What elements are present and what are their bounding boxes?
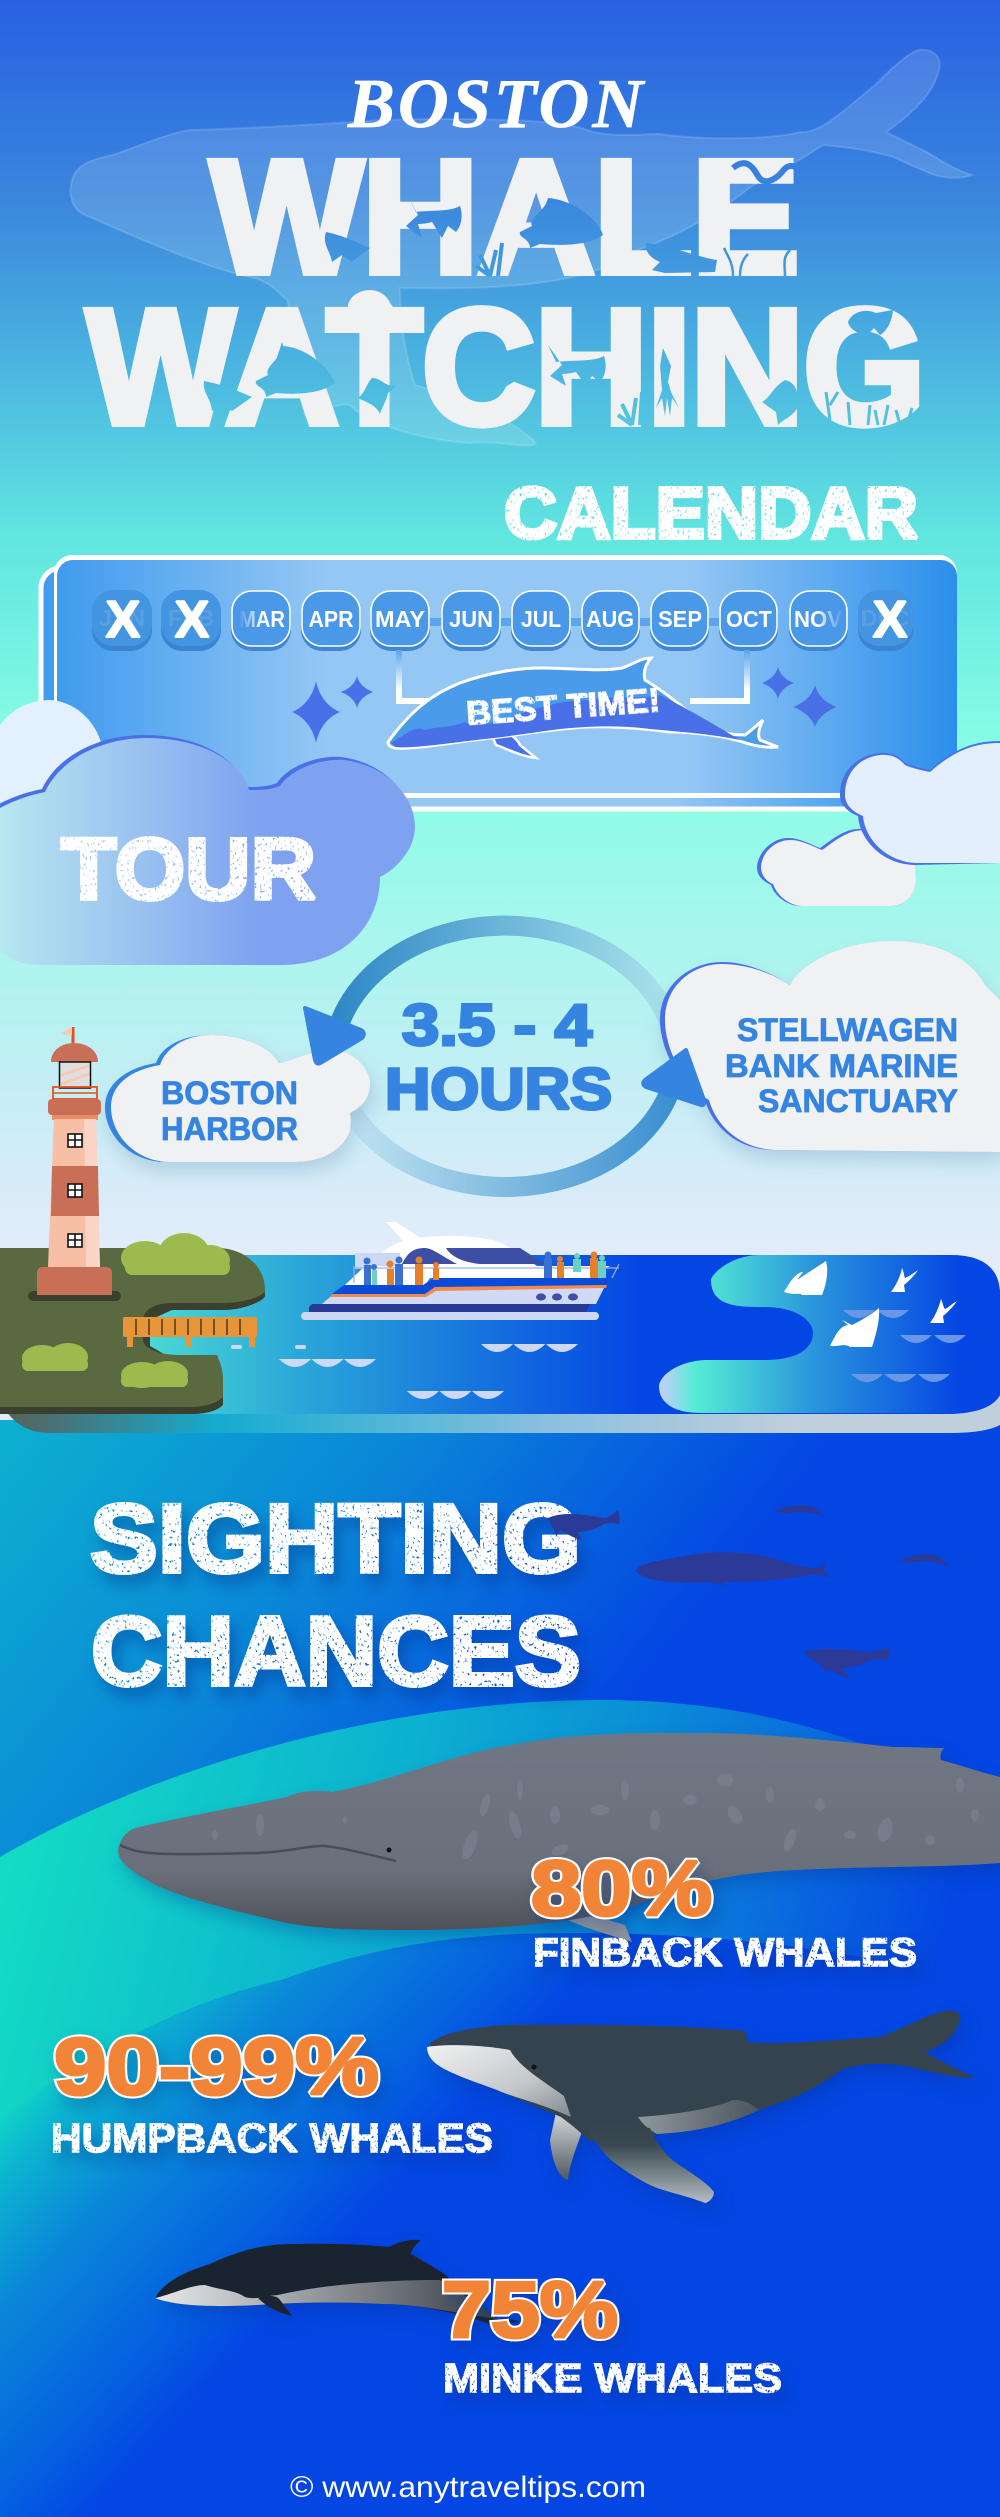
humpback front flipper xyxy=(585,2120,714,2203)
lighthouse flag xyxy=(72,1027,74,1043)
pill: September: SEP xyxy=(658,606,702,632)
boat base plate xyxy=(301,1312,599,1320)
label: humpback whales: HUMPBACK WHALES xyxy=(51,2115,493,2161)
pill: October: OCT xyxy=(726,606,772,632)
heading: Sighting Chances xyxy=(90,1484,581,1706)
icon: fish in H xyxy=(406,196,462,238)
lighthouse base xyxy=(37,1267,112,1295)
whale body xyxy=(388,658,778,748)
boat deck xyxy=(345,1266,610,1285)
lighthouse base shadow xyxy=(28,1291,121,1301)
number: 75%: 75% xyxy=(442,2265,618,2354)
boat passengers xyxy=(364,1252,606,1285)
number: 90-99%: 90-99% xyxy=(54,2022,379,2112)
sea right gradient shape xyxy=(659,1255,1000,1413)
boat xyxy=(301,1222,619,1320)
number: 75%: 75% xyxy=(442,2265,618,2354)
heading: tour: TOUR xyxy=(61,821,316,918)
icon: fish xyxy=(548,345,606,386)
pill: April: APR xyxy=(308,606,354,632)
finback mouth line xyxy=(120,1845,396,1861)
whale belly xyxy=(391,695,740,747)
pill: March xyxy=(231,591,291,651)
title word: Watching: WATCHING xyxy=(87,275,925,458)
pill: August: AUG xyxy=(586,606,634,632)
icon: big fish xyxy=(256,346,335,397)
boat blue stripe xyxy=(332,1278,609,1294)
icon: corals in G xyxy=(826,392,912,425)
label: minke whales: MINKE WHALES xyxy=(443,2355,782,2401)
bush large xyxy=(121,1233,230,1275)
number: 80%: 80% xyxy=(531,1844,712,1932)
lighthouse gallery xyxy=(48,1099,101,1115)
cloud: small right xyxy=(757,829,916,906)
ring top arc xyxy=(336,926,672,1035)
pill: June: JUN xyxy=(449,606,493,632)
pill: February unavailable: X xyxy=(175,591,210,649)
icon: seahorse xyxy=(762,380,798,425)
humpback whale xyxy=(427,2010,976,2203)
humpback body xyxy=(430,2010,976,2141)
finback mottling xyxy=(212,1774,979,1861)
icon: sea plants xyxy=(724,248,790,276)
boat antenna and dome xyxy=(386,1222,424,1243)
back panel xyxy=(41,568,941,809)
number: 90-99%: 90-99% xyxy=(54,2022,379,2112)
pill: June xyxy=(441,591,501,651)
whale flipper xyxy=(491,732,536,758)
silhouette: dolphin two xyxy=(899,1554,951,1567)
label: 3.5 - 4 hours: 3.5 - 4 xyxy=(402,993,592,1058)
icon: coral 2 xyxy=(618,392,642,425)
route ring xyxy=(336,926,672,1187)
title: Boston Whale Watching xyxy=(87,66,925,458)
minke body xyxy=(155,2240,520,2324)
pill: May: MAY xyxy=(375,606,425,632)
finback whale xyxy=(118,1733,1000,1942)
pill: December unavailable: DEC xyxy=(861,605,909,631)
ring bottom arc xyxy=(345,1085,672,1187)
best time whale badge xyxy=(388,658,778,758)
heading: Sighting Chances: CHANCES xyxy=(91,1596,581,1706)
heading: Sighting Chances: SIGHTING xyxy=(90,1484,581,1593)
distant whale silhouettes xyxy=(548,1505,951,1678)
minke belly xyxy=(155,2280,497,2319)
stat: finback xyxy=(531,1844,917,1975)
boat back cabin xyxy=(355,1253,400,1269)
label: Stellwagen Bank Marine Sanctuary: BANK MARINE xyxy=(725,1048,958,1084)
boat windows xyxy=(402,1248,457,1264)
sky background xyxy=(0,0,1000,1425)
pill: February unavailable xyxy=(161,590,221,651)
number: 80%: 80% xyxy=(531,1844,712,1932)
pill: November xyxy=(789,591,848,651)
title word: Boston: BOSTON xyxy=(347,66,645,143)
arrow: to Boston Harbor xyxy=(305,1008,364,1064)
label: Stellwagen Bank Marine Sanctuary xyxy=(725,1012,958,1119)
silhouette: dolphin one xyxy=(774,1505,825,1517)
label: Boston Harbor: BOSTON xyxy=(161,1075,298,1111)
title word: Whale: WHALE xyxy=(211,127,799,306)
pill: January unavailable xyxy=(92,590,152,651)
sea water xyxy=(0,1255,1000,1414)
icon: whale flukes xyxy=(784,1261,957,1347)
pill: August xyxy=(581,591,640,651)
tour cloud fill xyxy=(0,738,415,965)
pill: February unavailable: FEB xyxy=(168,605,214,631)
finback eye xyxy=(386,1848,392,1852)
minke flipper xyxy=(258,2296,292,2316)
pill: December unavailable: X xyxy=(873,591,908,649)
finback body xyxy=(118,1733,1000,1930)
icon: eel on E xyxy=(733,163,796,181)
pill: September xyxy=(650,591,709,651)
sea scene xyxy=(0,1027,1000,1433)
cloud: big right xyxy=(840,741,1000,865)
island xyxy=(0,1248,265,1407)
boat navy stripe xyxy=(309,1304,590,1312)
label: Stellwagen Bank Marine Sanctuary: SANCTUARY xyxy=(758,1083,958,1119)
sparkles right xyxy=(762,667,837,727)
month pills row xyxy=(92,590,913,651)
translucent humpback whale behind the title xyxy=(70,50,972,446)
icon: walrus xyxy=(646,243,717,273)
bush left xyxy=(22,1343,88,1371)
stat: humpback xyxy=(51,2022,493,2161)
cloud: back left xyxy=(0,700,130,860)
hill: upper teal xyxy=(0,1700,1000,2200)
silhouette: small humpback xyxy=(804,1648,890,1678)
pill: December unavailable xyxy=(858,590,913,651)
tour cloud outline xyxy=(0,735,412,962)
hill: lower teal xyxy=(0,1933,1000,2517)
lighthouse lantern xyxy=(60,1062,90,1088)
pill: May xyxy=(370,591,430,651)
icon: fish in G xyxy=(848,310,893,335)
lighthouse windows xyxy=(68,1134,82,1247)
silhouette: sperm whale xyxy=(636,1552,832,1586)
humpback rear flipper xyxy=(550,2112,584,2180)
pill: July: JUL xyxy=(521,606,561,632)
humpback eye xyxy=(532,2064,536,2070)
bush right xyxy=(121,1361,188,1388)
icon: turtle on top of A xyxy=(348,290,393,307)
arrow: to Stellwagen xyxy=(643,1050,704,1105)
finback flipper xyxy=(568,1915,632,1942)
footer credit: © www.anytraveltips.com xyxy=(290,2471,646,2504)
label: 3.5 - 4 hours xyxy=(385,993,612,1122)
pill: July xyxy=(511,591,571,651)
lighthouse balcony xyxy=(53,1087,97,1099)
icon: coral xyxy=(476,243,502,276)
cloud: tour xyxy=(0,735,415,965)
pill: January unavailable: JAN xyxy=(99,605,145,631)
pill: January unavailable: X xyxy=(106,591,141,649)
lighthouse dome xyxy=(51,1043,98,1062)
pill: October xyxy=(719,591,778,651)
humpback belly xyxy=(638,2100,759,2134)
deep sea background xyxy=(0,1420,1000,2517)
boat hull xyxy=(322,1278,609,1304)
icon: squid xyxy=(656,348,679,416)
cloud: Stellwagen xyxy=(660,941,1000,1152)
lighthouse tower xyxy=(48,1119,100,1267)
minke whale xyxy=(155,2240,520,2324)
icon: seal in W xyxy=(325,232,370,262)
label: Boston Harbor: HARBOR xyxy=(161,1111,298,1147)
best-time bracket xyxy=(399,650,747,701)
stat: minke xyxy=(442,2265,782,2401)
icon: fish face in C xyxy=(480,341,529,393)
pill: April xyxy=(301,591,361,651)
label: 3.5 - 4 hours: HOURS xyxy=(385,1057,612,1122)
icon: big fish in A xyxy=(520,198,603,248)
waves near whales xyxy=(843,1310,966,1382)
island edge xyxy=(0,1254,265,1414)
boat orange stripe xyxy=(330,1285,607,1297)
lighthouse xyxy=(28,1027,121,1301)
label: Boston Harbor xyxy=(161,1075,298,1147)
label: finback whales: FINBACK WHALES xyxy=(533,1931,917,1975)
label: Stellwagen Bank Marine Sanctuary: STELLWAGEN xyxy=(737,1012,958,1048)
dock xyxy=(123,1317,257,1347)
label: best time: BEST TIME! xyxy=(465,681,661,732)
humpback jaw xyxy=(427,2045,571,2117)
waves near dock xyxy=(231,1344,578,1399)
icon: sea turtle xyxy=(358,378,397,414)
heading: Calendar: CALENDAR xyxy=(504,474,918,554)
pill: November: NOV xyxy=(794,606,843,632)
front panel xyxy=(54,555,957,798)
month connector xyxy=(420,618,730,626)
sea band xyxy=(0,1380,1000,1433)
icon: seal xyxy=(204,381,252,411)
panel: calendar xyxy=(41,555,957,809)
boat portholes xyxy=(536,1293,578,1301)
pill: March: MAR xyxy=(239,606,285,632)
silhouette: humpback xyxy=(548,1510,620,1540)
sparkles left xyxy=(292,676,373,743)
cloud: Boston Harbor xyxy=(105,1035,370,1162)
